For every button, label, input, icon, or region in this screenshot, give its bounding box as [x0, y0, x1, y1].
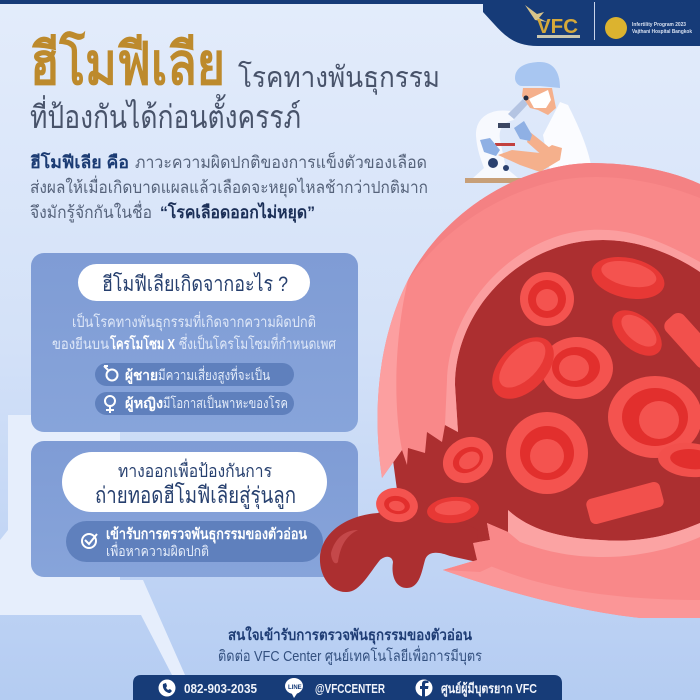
icon: line: LINE [288, 685, 302, 691]
upper vessel wall [378, 163, 700, 478]
lumen and spilled blood [392, 200, 700, 570]
intro text: “โรคเลือดออกไม่หยุด” [160, 202, 315, 223]
test recommendation pill: เพื่อหาความผิดปกติ [106, 542, 209, 559]
illustration: doctor with microscope [465, 62, 591, 183]
cause text: เป็นโรคทางพันธุกรรมที่เกิดจากความผิดปกติ [72, 311, 316, 332]
title [30, 29, 440, 135]
line id: @VFCCENTER [315, 681, 385, 696]
red blood cell [657, 440, 700, 480]
female carrier pill: ผู้หญิง [125, 395, 163, 412]
red blood cell [481, 326, 565, 410]
blood drop [320, 500, 478, 592]
red blood cell [541, 337, 613, 399]
prevention heading: ทางออกเพื่อป้องกันการ [118, 458, 272, 481]
cause text: ซึ่งเป็นโครโมโซมที่กำหนดเพศ [179, 333, 336, 353]
title: โรคทางพันธุกรรม [238, 60, 440, 95]
contact call to action: สนใจเข้ารับการตรวจพันธุกรรมของตัวอ่อน [228, 626, 473, 645]
prevention heading [62, 452, 327, 512]
header caption [632, 22, 693, 35]
prevention heading: ถ่ายทอดฮีโมฟีเลียสู่รุ่นลูก [95, 482, 296, 509]
contact call to action [218, 626, 482, 666]
lower wall over blood drop [443, 523, 508, 572]
female carrier pill: มีโอกาสเป็นพาหะของโรค [163, 394, 288, 411]
cause heading [78, 264, 310, 301]
blood vessel illustration [378, 163, 700, 618]
red blood cell over blood drop [426, 495, 480, 525]
cause heading: ฮีโมฟีเลียเกิดจากอะไร ? [102, 272, 288, 296]
intro text: ส่งผลให้เมื่อเกิดบาดแผลแล้วเลือดจะหยุดไหลช้ากว่าปกติมาก [30, 175, 428, 198]
red blood cell [506, 412, 588, 494]
panel: prevention [31, 441, 358, 577]
red blood cell [434, 428, 502, 492]
male risk pill: มีความเสี่ยงสูงที่จะเป็น [158, 366, 270, 384]
icon: VFC logo: VFC [537, 16, 578, 38]
lower wall outer band [443, 560, 700, 618]
phone number: 082-903-2035 [184, 681, 257, 696]
red blood cell [661, 310, 700, 372]
test recommendation pill [66, 521, 323, 562]
icon: facebook [416, 680, 432, 697]
upper wall outer band [378, 280, 408, 478]
cause text: โครโมโซม X [109, 334, 175, 353]
blood drop highlight [331, 530, 358, 563]
red blood cell [588, 251, 668, 305]
header band [0, 0, 700, 46]
lower wall inner band [508, 510, 700, 557]
intro text [30, 151, 428, 223]
icon: gold medal [605, 17, 627, 39]
test recommendation pill: เข้ารับการตรวจพันธุกรรมของตัวอ่อน [106, 526, 308, 544]
red blood cell over blood drop [373, 485, 421, 525]
lower vessel wall [443, 510, 700, 618]
background shape [0, 415, 185, 675]
title: ที่ป้องกันได้ก่อนตั้งครรภ์ [30, 94, 301, 135]
facebook page: ศูนย์ผู้มีบุตรยาก VFC [441, 681, 537, 697]
icon: female symbol [105, 396, 115, 413]
icon: check [82, 534, 97, 548]
upper wall inner band [445, 230, 700, 432]
cause text: ของยีนบน [52, 336, 109, 353]
icon: male symbol [104, 366, 118, 380]
header caption: Vajthani Hospital Bangkok [632, 29, 693, 35]
red blood cell [520, 272, 574, 326]
red blood cell [604, 301, 670, 365]
icon: line [285, 678, 303, 698]
panel: cause [31, 253, 358, 432]
male risk pill [95, 363, 294, 386]
header caption: Infertility Program 2023 [632, 22, 686, 28]
footer contact bar [133, 675, 562, 700]
intro text: จึงมักรู้จักกันในชื่อ [30, 200, 152, 223]
title: ฮีโมฟีเลีย [30, 29, 225, 97]
cause text [52, 311, 336, 353]
icon: phone [158, 680, 176, 696]
icon: VFC logo [525, 5, 580, 38]
contact call to action: ติดต่อ VFC Center ศูนย์เทคโนโลยีเพื่อการมีบุตร [218, 645, 482, 666]
red blood cell [608, 376, 700, 458]
intro text: ภาวะความผิดปกติของการแข็งตัวของเลือด [135, 151, 427, 172]
male risk pill: ผู้ชาย [125, 367, 158, 384]
red blood cell [585, 481, 665, 525]
female carrier pill [95, 392, 294, 415]
intro text: ฮีโมฟีเลีย คือ [30, 152, 129, 172]
